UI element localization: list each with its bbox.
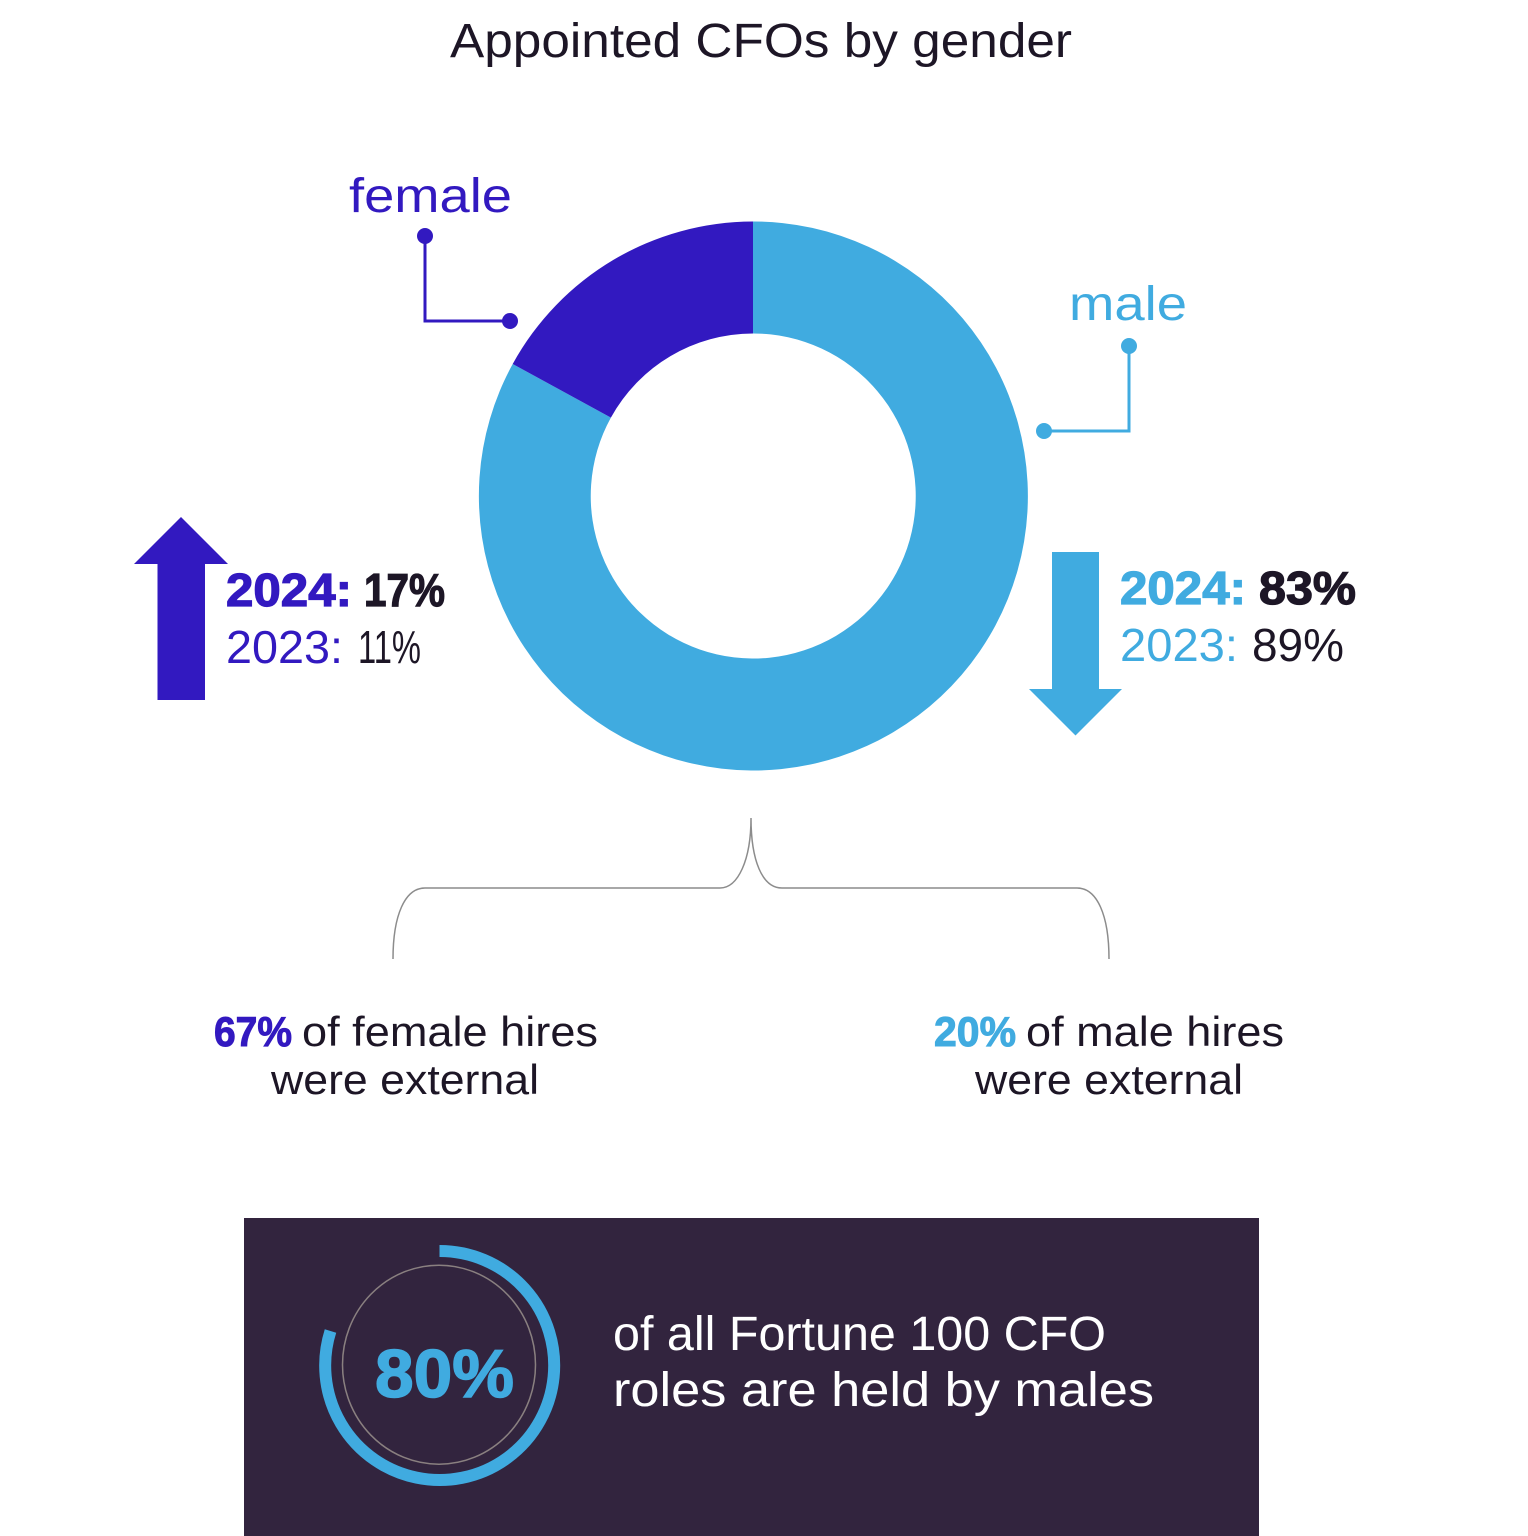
arrow: down xyxy=(1029,552,1122,736)
male external hires text xyxy=(934,1008,1284,1103)
male 2023 xyxy=(1120,619,1344,671)
leader line: male xyxy=(1036,338,1137,439)
donut chart xyxy=(479,221,1028,770)
female 2023: 11% xyxy=(358,621,421,673)
donut segment: male xyxy=(479,221,1028,770)
female 2023: 2023: xyxy=(226,621,343,673)
callout text xyxy=(613,1308,1154,1417)
donut segment: female xyxy=(513,222,753,418)
female 2024: 2024: xyxy=(226,564,352,616)
male external hires text: were external xyxy=(974,1056,1243,1103)
male 2023: 2023: xyxy=(1120,619,1238,671)
callout text: roles are held by males xyxy=(613,1364,1154,1417)
male 2024 xyxy=(1120,562,1356,614)
female external hires text: 67% xyxy=(214,1008,292,1055)
male external hires text: 20% xyxy=(934,1008,1016,1055)
leader line: female xyxy=(417,228,518,329)
male external hires text: of male hires xyxy=(1026,1008,1284,1055)
label: male: male xyxy=(1069,278,1187,331)
title: Appointed CFOs by gender xyxy=(450,15,1072,68)
callout text: of all Fortune 100 CFO xyxy=(613,1308,1106,1361)
male 2024: 83% xyxy=(1259,562,1356,614)
female 2023 xyxy=(226,621,421,673)
female external hires text xyxy=(214,1008,598,1103)
female 2024: 17% xyxy=(364,564,445,616)
progress ring: 80% xyxy=(325,1251,554,1480)
female statistics xyxy=(226,564,445,673)
female external hires text: were external xyxy=(270,1056,539,1103)
brace xyxy=(393,818,1109,959)
label: female: female xyxy=(349,170,512,223)
arrow: up xyxy=(134,517,228,700)
female external hires text: of female hires xyxy=(302,1008,598,1055)
male statistics xyxy=(1120,562,1356,671)
male 2024: 2024: xyxy=(1120,562,1246,614)
male 2023: 89% xyxy=(1252,619,1344,671)
value: 80%: 80% xyxy=(375,1336,514,1412)
inner ring xyxy=(342,1265,536,1464)
panel: Fortune 100 callout xyxy=(244,1218,1259,1536)
female 2024 xyxy=(226,564,445,616)
